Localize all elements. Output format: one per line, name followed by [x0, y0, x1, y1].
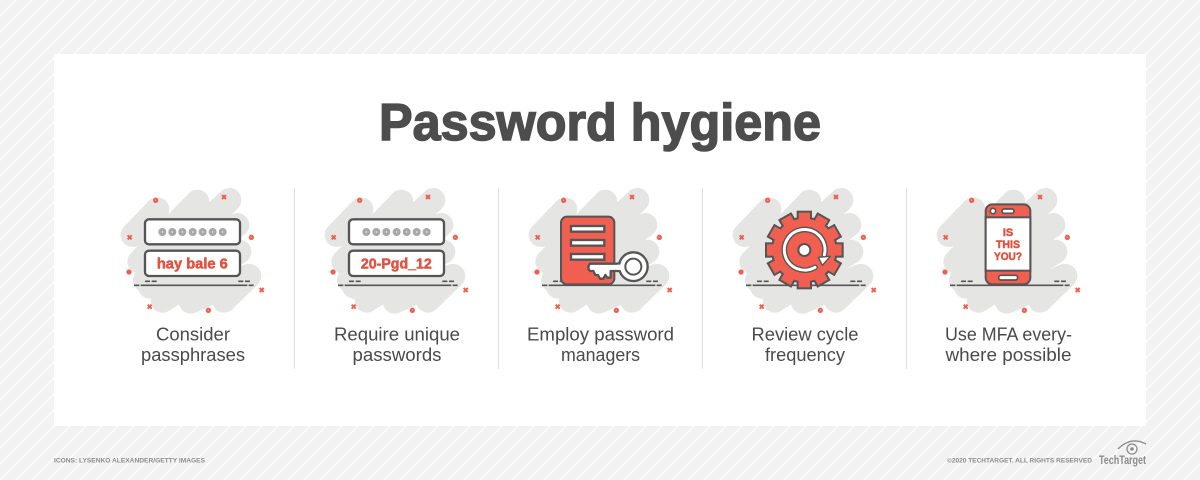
icon: gear with cycle arrow — [738, 195, 876, 313]
icon: phone with prompt — [942, 195, 1080, 313]
icon: phone with prompt: YOU? — [994, 251, 1022, 263]
icon: passphrase fields — [126, 195, 264, 313]
label: use MFA everywhere: where possible — [944, 345, 1072, 365]
white panel — [54, 54, 1146, 426]
label: require unique passwords: passwords — [352, 345, 442, 365]
TechTarget logo — [1099, 441, 1146, 467]
title: Password hygiene — [379, 94, 821, 152]
icon: phone with prompt: IS — [1003, 227, 1013, 239]
label: employ password managers: Employ password — [527, 324, 674, 344]
icon credit: ICONS: LYSENKO ALEXANDER/GETTY IMAGES — [54, 458, 205, 464]
column dividers — [294, 188, 906, 369]
logo wordmark: TechTarget — [1099, 453, 1146, 467]
icon: unique password fields: 20-Pgd_12 — [361, 257, 432, 273]
label: review cycle frequency: Review cycle — [752, 324, 858, 344]
copyright: ©2020 TECHTARGET. ALL RIGHTS RESERVED — [947, 456, 1092, 464]
label: consider passphrases: Consider — [156, 324, 230, 344]
icon: phone with prompt: THIS — [996, 239, 1020, 251]
icon: passphrase fields: hay bale 6 — [157, 257, 228, 273]
icon: eye — [1118, 441, 1146, 454]
column: require unique passwords — [330, 195, 468, 365]
column: review cycle frequency — [738, 195, 876, 365]
label: consider passphrases: passphrases — [141, 345, 245, 365]
column: consider passphrases — [126, 195, 264, 365]
icon: unique password fields — [330, 195, 468, 313]
label: use MFA everywhere: Use MFA every- — [945, 324, 1072, 344]
column: employ password managers — [527, 195, 674, 365]
icon: document and key — [534, 195, 672, 313]
label: review cycle frequency: frequency — [765, 345, 845, 365]
label: employ password managers: managers — [561, 345, 640, 365]
label: require unique passwords: Require unique — [334, 324, 460, 344]
column: use MFA everywhere — [942, 195, 1080, 365]
